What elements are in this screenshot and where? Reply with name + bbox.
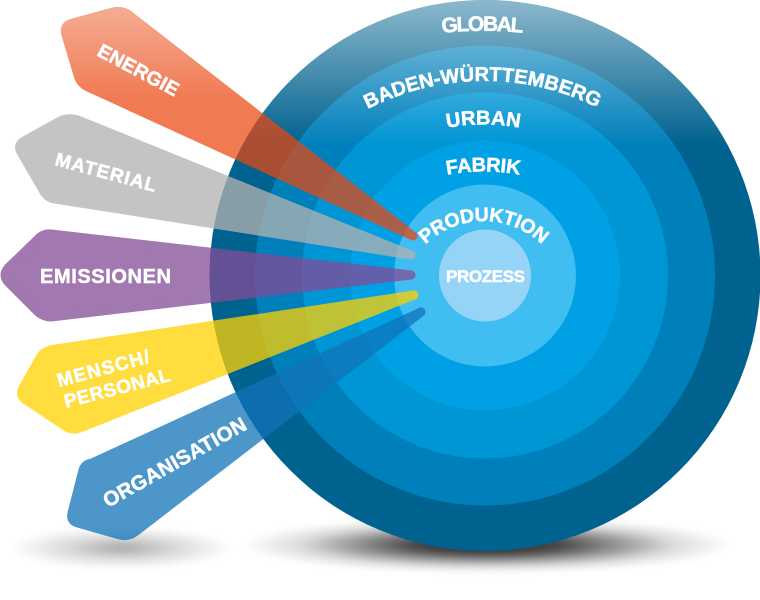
label: Prozess: PROZESS (446, 267, 525, 286)
ring: Prozess (439, 230, 531, 322)
arrow: Material (20, 119, 411, 255)
ring: Produktion (394, 184, 576, 366)
ring: Fabrik (350, 140, 620, 410)
shadow: circle (242, 517, 732, 573)
ring: urban (302, 92, 668, 458)
label: Material: MATERIAL (53, 150, 159, 197)
label: Produktion: PRODUKTION (418, 207, 550, 244)
arrow: Organisation (72, 312, 421, 536)
arrow: Mensch/Personal (22, 295, 414, 429)
label: Personal: PERSONAL (62, 365, 173, 413)
label: Fabrik: FABRIK (446, 158, 522, 175)
label: Mensch/: MENSCH/ (55, 347, 153, 392)
label: Energie: ENERGIE (94, 40, 183, 101)
ring: Baden-Württemberg (255, 46, 715, 506)
shadow: organisation arrow (10, 527, 234, 569)
label: Baden-Württemberg: BADEN-WÜRTTEMBERG (362, 64, 601, 109)
label: Urban: URBAN (446, 110, 521, 128)
label: Organisation: ORGANISATION (99, 413, 251, 512)
label: Emissionen: EMISSIONEN (40, 266, 171, 288)
top highlight (210, 0, 760, 276)
ring: global (210, 0, 760, 551)
arrow: Energie (65, 11, 413, 236)
arrow: Emissionen (5, 234, 411, 317)
label: Global: GLOBAL (442, 16, 523, 33)
concentric circles (210, 0, 760, 551)
